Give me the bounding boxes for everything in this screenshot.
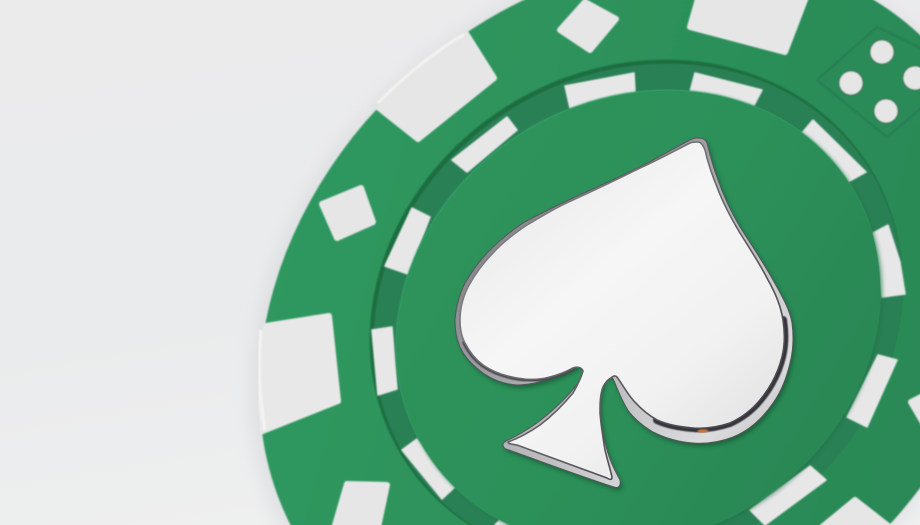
dice recess [817,27,920,137]
groove ring [274,0,920,525]
stripe 1 [565,73,635,108]
spade polished face with inner line [460,142,784,479]
outer white edge blocks [240,0,920,525]
illustration: poker chip on a light background [252,0,920,525]
block: left [240,316,338,440]
stripe 11 [495,517,525,525]
pip: top [870,40,894,64]
pip: left [839,71,863,95]
pip: right [903,66,920,90]
stripe 3 [802,120,866,182]
dice panel with four pips [817,27,920,137]
stripe 7 [452,117,517,172]
stripe 2 [690,73,762,109]
stripe 4 [873,225,905,297]
stripe 6 [750,466,826,525]
diamond: top [560,2,616,50]
inner disc [309,0,920,525]
stripe 8 [385,208,430,274]
groove white stripes [372,73,905,525]
stripe 5 [847,355,897,427]
spade shadow [457,141,795,491]
dark reflection band: lower right lobe [657,320,784,428]
highlight: upper left block edge [378,34,464,103]
block: bottom [333,484,387,525]
stripe 9 [372,327,397,395]
stripe 10 [402,439,457,499]
diamond: left [322,188,373,238]
block: right edge [911,395,920,426]
block: bottom right [816,500,896,525]
pip: bottom [874,99,898,123]
highlight: left block edge [259,330,265,430]
block: upper left [376,30,498,143]
reflection: orange glint on the rim [698,429,708,433]
spade chrome rim [455,138,793,488]
block: top [690,0,808,52]
chrome spade emblem [455,138,795,491]
dark reflection band: lower left lobe [465,343,573,379]
